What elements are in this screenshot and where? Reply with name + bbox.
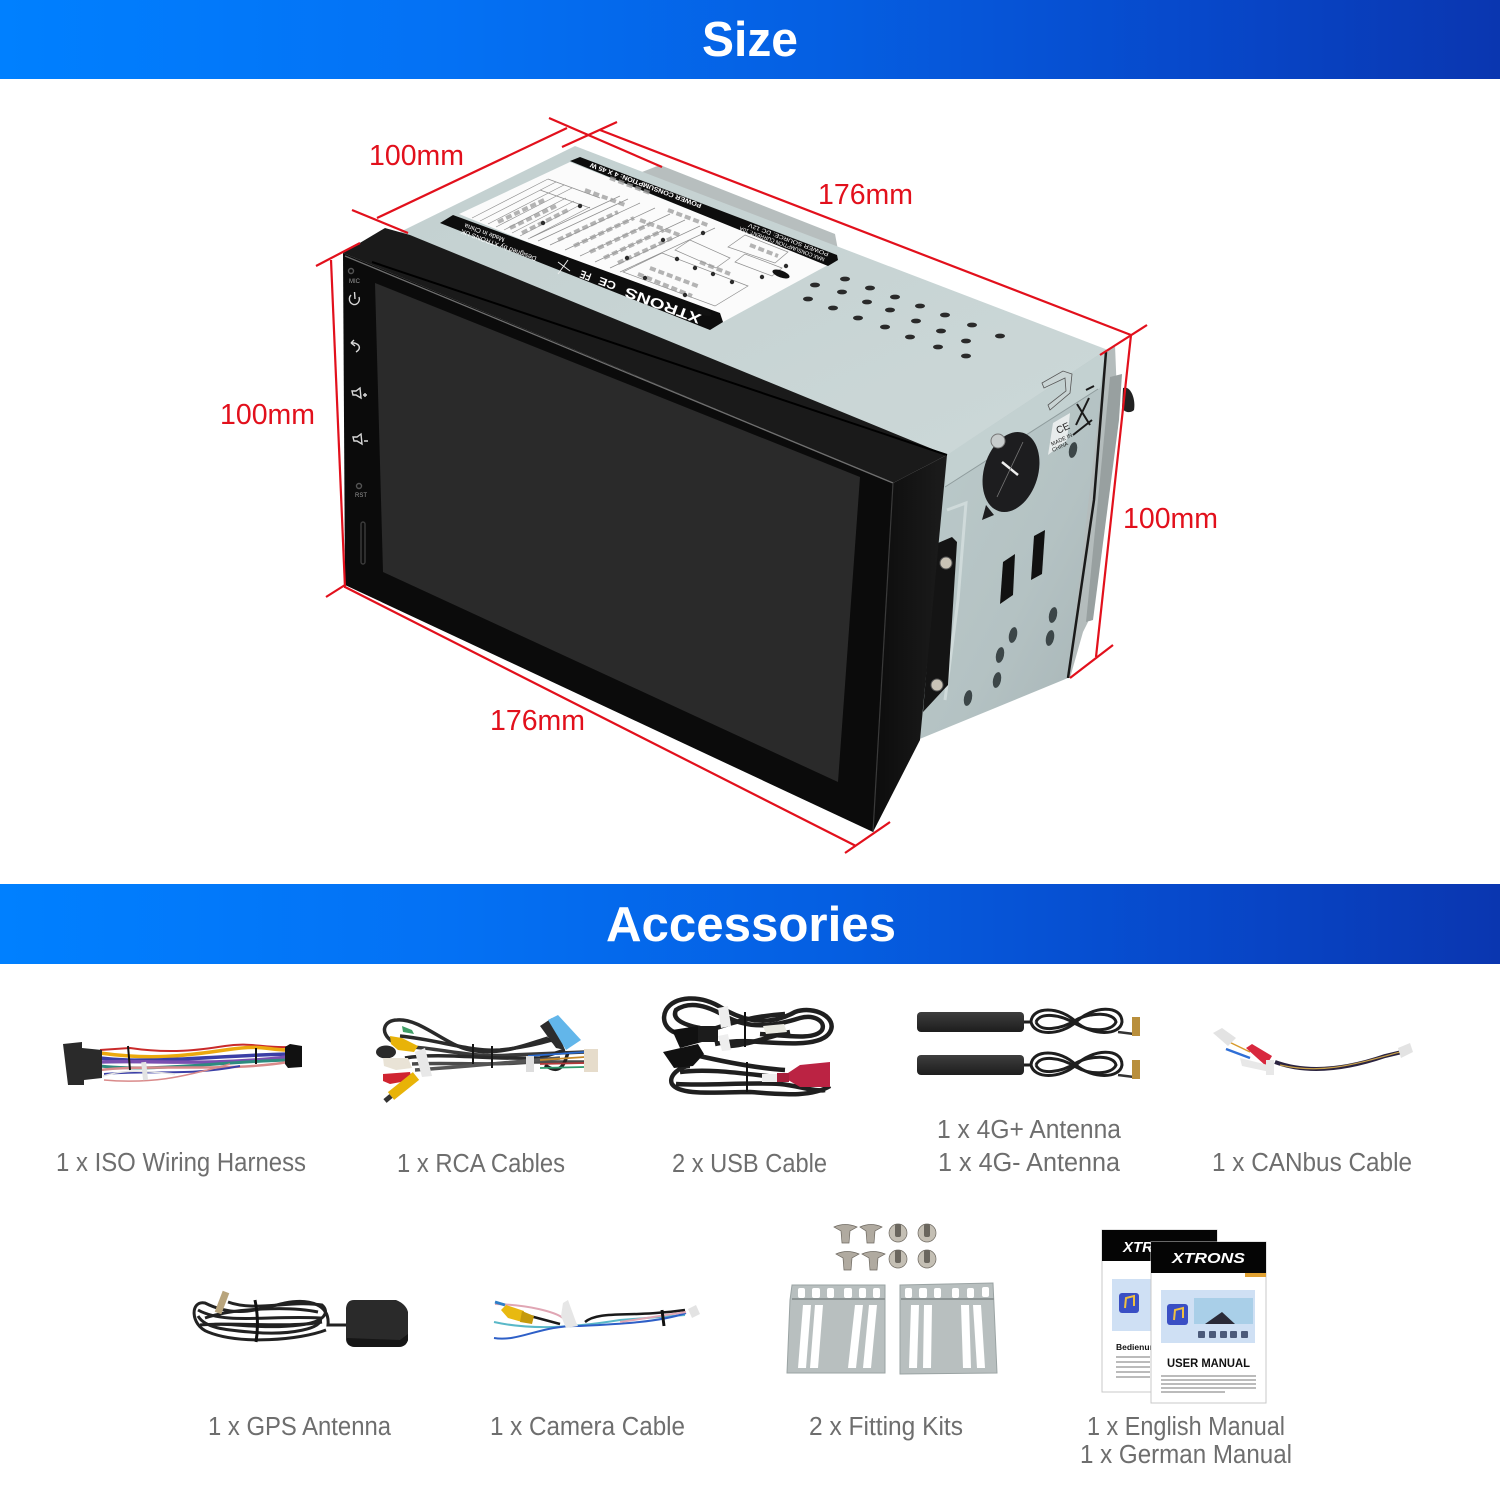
spec label	[440, 157, 838, 330]
label wiring tables	[472, 178, 791, 318]
mic and reset labels	[349, 279, 367, 499]
accessory: RCA cables	[376, 1015, 598, 1101]
German manual: Bedienungs	[1116, 1342, 1165, 1352]
front panel buttons	[348, 268, 368, 564]
label strip text: XTRONS	[622, 284, 703, 327]
label strip text: POWER CONSUMPTION: 4 X 45 W	[588, 160, 703, 209]
caption: English manual: 1 x English Manual	[1087, 1413, 1285, 1441]
screen	[375, 283, 860, 782]
label: right height 100mm: 100mm	[1123, 503, 1218, 535]
caption: GPS antenna: 1 x GPS Antenna	[208, 1413, 392, 1441]
label bottom black strip	[440, 215, 723, 330]
caption: CANbus cable: 1 x CANbus Cable	[1212, 1149, 1412, 1177]
screws	[834, 1224, 936, 1270]
header: Accessories	[0, 884, 1500, 964]
header: Size	[0, 0, 1500, 79]
compliance sticker: CE	[1055, 421, 1072, 437]
accessory: 4G antennas	[917, 1009, 1140, 1079]
header: Size: Size	[702, 13, 798, 67]
caption: RCA cables: 1 x RCA Cables	[397, 1150, 565, 1178]
label top black strip	[570, 157, 838, 266]
USB style slots	[1000, 530, 1045, 604]
English manual	[1151, 1242, 1266, 1403]
metal side face	[905, 350, 1106, 745]
caption: 4G minus antenna: 1 x 4G- Antenna	[938, 1149, 1121, 1177]
caption: German manual: 1 x German Manual	[1080, 1441, 1292, 1469]
accessory: fitting kit	[787, 1224, 997, 1374]
label strip text: POWER SOURCE: DC 12V	[747, 221, 830, 257]
accessory: camera cable	[494, 1300, 700, 1339]
label strip text: CE	[597, 274, 618, 291]
mic and reset labels: MIC	[349, 279, 361, 285]
caption: camera cable: 1 x Camera Cable	[490, 1413, 685, 1441]
icon: power	[349, 292, 359, 305]
black round fan sticker	[973, 425, 1049, 520]
caption: fitting kits: 2 x Fitting Kits	[809, 1413, 963, 1441]
vent holes on top	[803, 277, 1005, 358]
accessory: GPS antenna	[194, 1292, 408, 1347]
accessory: manuals	[1102, 1230, 1266, 1403]
compliance sticker	[1048, 386, 1094, 455]
label: left height 100mm: 100mm	[220, 399, 315, 431]
German manual: XTRONS	[1122, 1239, 1186, 1256]
English manual: USER MANUAL	[1167, 1358, 1250, 1370]
mic and reset labels: RST	[355, 493, 367, 499]
label strip text: Made in China	[463, 221, 506, 243]
side holes	[962, 441, 1079, 707]
gloss line along front	[345, 256, 893, 483]
side panel stamped ridge	[945, 503, 966, 700]
compliance sticker: MADE IN	[1050, 433, 1074, 448]
label strip text: Designed by XTRONS UK	[459, 227, 538, 262]
compliance sticker: CHINA	[1051, 441, 1070, 454]
icon: volume down	[353, 434, 368, 444]
German manual	[1102, 1230, 1217, 1392]
label strip text	[459, 160, 830, 327]
bracket left	[787, 1285, 885, 1373]
English manual: XTRONS	[1171, 1250, 1245, 1267]
front black face	[343, 253, 893, 832]
header: Accessories: Accessories	[606, 898, 896, 952]
black rear edge of side panel	[1068, 352, 1106, 678]
side top lip	[945, 350, 1106, 487]
clip on side	[1042, 371, 1072, 410]
label: top width 176mm: 176mm	[818, 179, 913, 211]
caption: ISO wiring harness: 1 x ISO Wiring Harness	[56, 1149, 306, 1177]
icon: back	[351, 340, 359, 352]
caption: 4G plus antenna: 1 x 4G+ Antenna	[937, 1116, 1122, 1144]
dimension lines	[316, 118, 1147, 853]
rear plate strip	[642, 165, 1134, 678]
antenna two	[917, 1052, 1140, 1079]
black mounting bracket with screws	[923, 537, 957, 712]
antenna one	[917, 1009, 1140, 1036]
label: bottom width 176mm: 176mm	[490, 705, 585, 737]
label strip text: MAX CONSUMPTION CURRENT: 10A	[739, 225, 826, 262]
bracket right	[900, 1283, 997, 1374]
black bezel top edge	[343, 228, 947, 483]
metal top face	[400, 146, 1108, 455]
label: depth 100mm: 100mm	[369, 140, 464, 172]
wires	[100, 1045, 288, 1081]
accessory: USB cables	[663, 998, 832, 1094]
black bezel side	[873, 455, 947, 832]
accessory: CANbus cable	[1213, 1028, 1413, 1075]
label strip text: FE	[579, 267, 593, 282]
caption: USB cable: 2 x USB Cable	[672, 1150, 827, 1178]
accessory: ISO wiring harness	[63, 1042, 302, 1085]
icon: volume up	[352, 388, 367, 398]
panel: head unit product photo	[343, 146, 1134, 832]
